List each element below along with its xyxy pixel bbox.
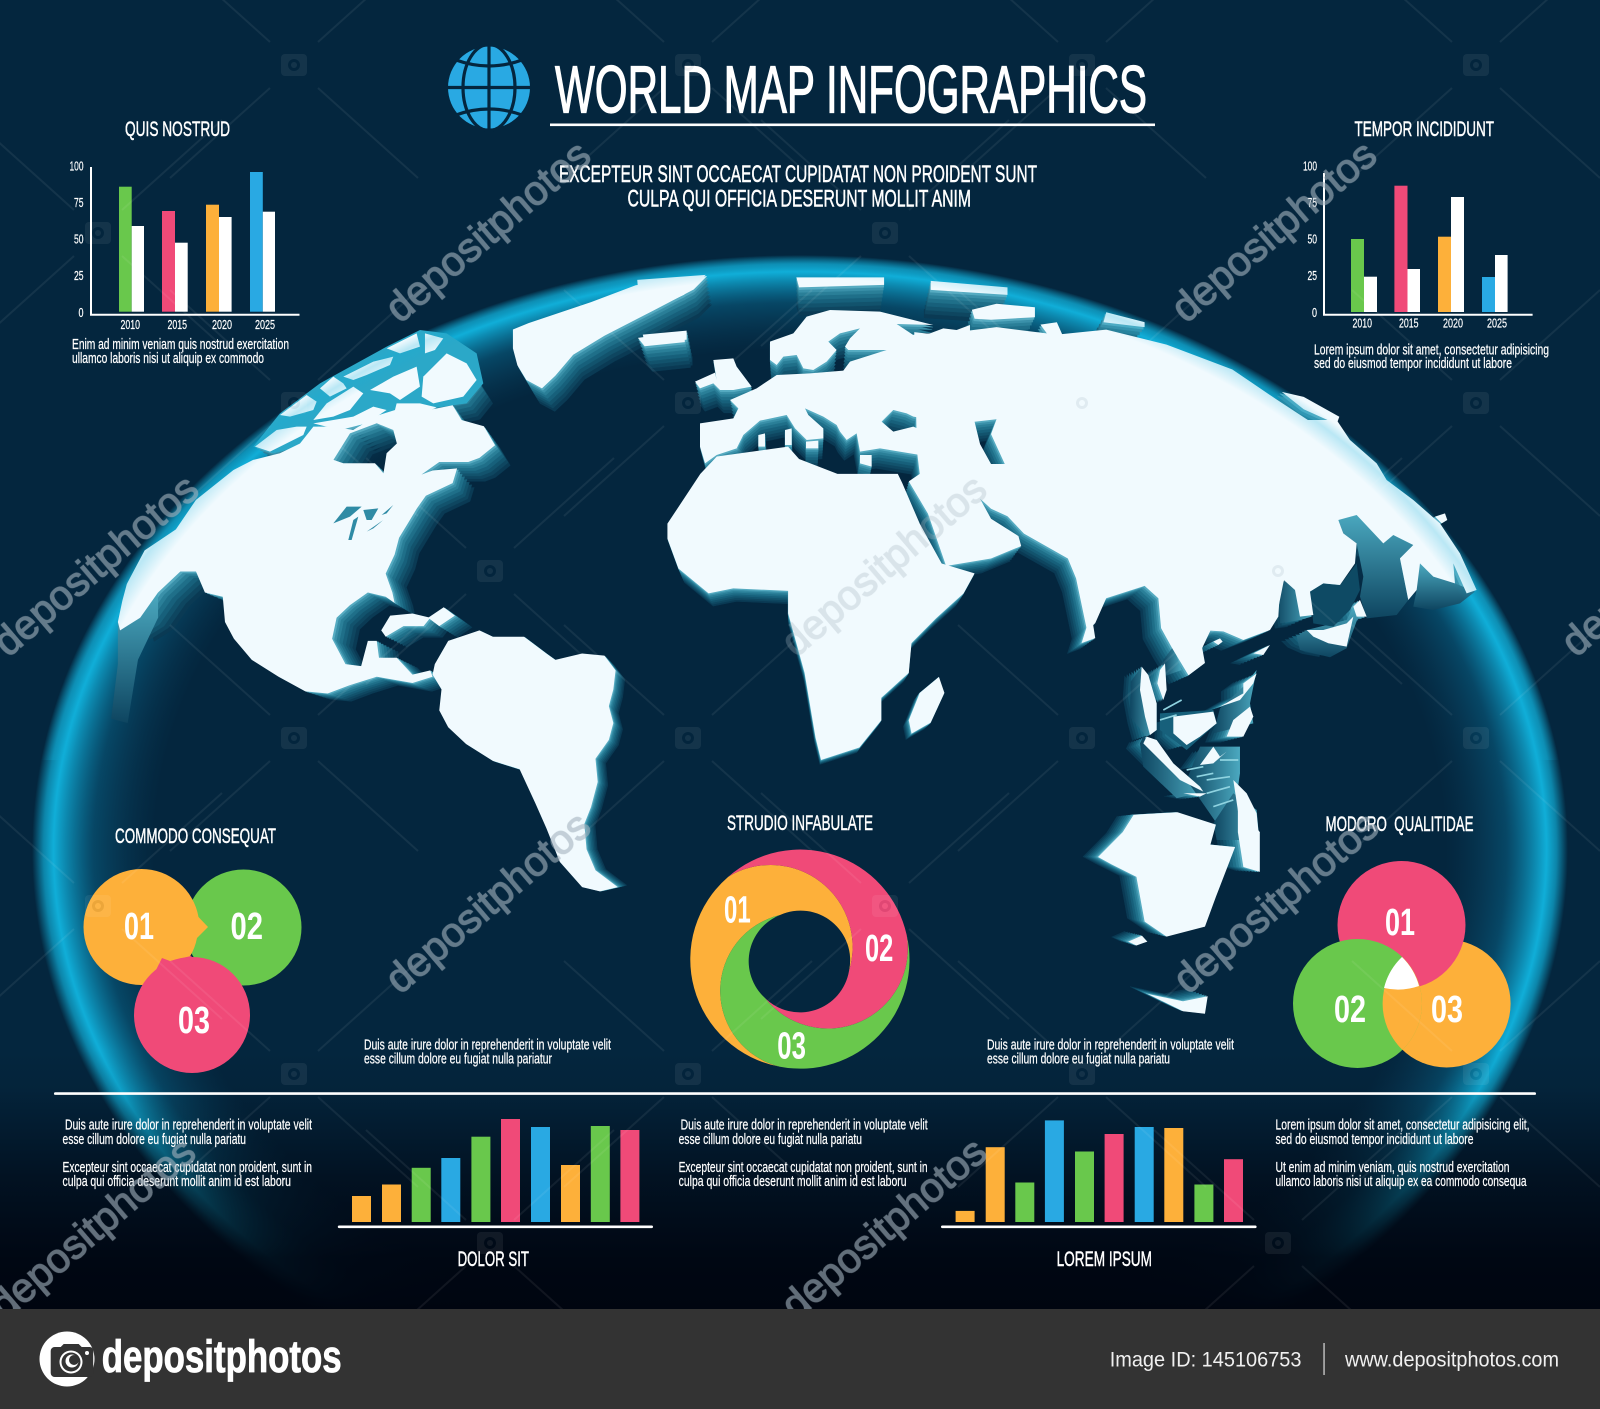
watermarks: depositphotos (1164, 802, 1387, 1002)
x labels: 2010 (1352, 316, 1372, 330)
watermarks: depositphotos (376, 131, 599, 331)
divider (1323, 1343, 1325, 1375)
subtitle (559, 161, 1037, 212)
ring segment orange (690, 865, 853, 1067)
text block: centre right: Duis aute irure dolor in reprehenderit in voluptate velit (987, 1038, 1234, 1054)
numbers: 02 (865, 928, 893, 970)
y labels: 0 (1312, 305, 1317, 320)
panel: modoro qualitidae (1293, 813, 1511, 1068)
bars (956, 1120, 1243, 1222)
text block: bottom right (1276, 1118, 1530, 1190)
centre overlap (1384, 957, 1419, 990)
text block: centre left: Duis aute irure dolor in reprehenderit in voluptate velit (364, 1038, 611, 1054)
numbers: 03 (178, 1000, 210, 1042)
bottom fade (0, 1050, 1600, 1310)
numbers: 03 (1431, 989, 1463, 1031)
text block: bottom middle: Excepteur sint occaecat cupidatat non proident, sunt in (679, 1160, 928, 1176)
x labels: 2020 (1443, 316, 1463, 330)
panel: quis nostrud chart: ullamco laboris nisi ut aliquip ex commodo (72, 351, 264, 367)
text block: centre right (987, 1038, 1234, 1068)
numbers (124, 906, 263, 1042)
panel: tempor incididunt chart (1303, 118, 1549, 372)
world map with extruded continents (111, 275, 1477, 1014)
overlap orange on green (1382, 957, 1422, 1050)
panel: tempor incididunt chart: sed do eiusmod tempor incididunt ut labore (1314, 356, 1512, 372)
ring segment pink (728, 850, 908, 1029)
separator (54, 1092, 1536, 1095)
numbers: 02 (1334, 989, 1366, 1031)
watermarks: depositphotos (376, 802, 599, 1002)
icon: globe (446, 44, 532, 130)
y labels: 50 (74, 232, 84, 246)
watermarks: depositphotos (772, 1128, 995, 1328)
heading: COMMODO CONSEQUAT (115, 825, 276, 848)
x labels: 2015 (168, 317, 187, 332)
heading: QUIS NOSTRUD (125, 118, 230, 141)
text block: bottom left: Excepteur sint occaecat cupidatat non proident, sunt in (62, 1160, 312, 1176)
circle 02 (186, 870, 302, 986)
numbers: 01 (124, 906, 154, 948)
y labels: 100 (1303, 158, 1317, 174)
axes (1324, 173, 1533, 315)
text block: centre right: esse cillum dolore eu fugiat nulla pariatu (987, 1052, 1170, 1068)
text block: bottom middle: Duis aute irure dolor in reprehenderit in voluptate velit (681, 1118, 928, 1134)
circle 01 (83, 869, 208, 985)
great lakes (333, 505, 393, 540)
text block: centre left: esse cillum dolore eu fugiat nulla pariatur (364, 1052, 552, 1068)
caption: Enim ad minim veniam quis nostrud exercitation (72, 337, 289, 353)
baseline (338, 1226, 653, 1228)
text block: bottom left: culpa qui officia deserunt mollit anim id est laboru (62, 1174, 291, 1190)
icon: camera logo (40, 1332, 94, 1386)
heading: MODORO QUALITIDAE (1326, 813, 1474, 836)
numbers (1334, 902, 1463, 1031)
numbers: 02 (230, 906, 263, 948)
axes (91, 167, 300, 315)
panel: strudio infabulate (690, 812, 910, 1069)
text block: bottom middle: culpa qui officia deserunt mollit anim id est laboru (679, 1174, 907, 1190)
y labels: 75 (1308, 195, 1317, 210)
x labels (1352, 316, 1507, 330)
subtitle: EXCEPTEUR SINT OCCAECAT CUPIDATAT NON PROIDENT SUNT (559, 161, 1037, 188)
y labels: 75 (74, 195, 84, 210)
text block: centre left (364, 1038, 611, 1068)
numbers: 01 (724, 889, 751, 931)
ring segment green (720, 915, 910, 1069)
label: LOREM IPSUM (1057, 1248, 1152, 1271)
bars (1351, 186, 1508, 312)
y labels (70, 158, 84, 320)
text block: bottom middle (679, 1118, 928, 1190)
url: www.depositphotos.com (1344, 1348, 1559, 1372)
x labels: 2015 (1399, 316, 1418, 330)
y labels (1303, 158, 1317, 320)
text block: bottom right: sed do eiusmod tempor incididunt ut labore (1276, 1132, 1474, 1148)
watermarks: depositphotos (772, 465, 995, 665)
x labels (120, 317, 275, 332)
footer bar (0, 1309, 1600, 1409)
circle 01 (1338, 861, 1466, 989)
y labels: 25 (74, 268, 84, 283)
title underline (550, 124, 1155, 126)
label: DOLOR SIT (458, 1248, 529, 1271)
bar chart: dolor sit (338, 1119, 653, 1271)
bars (352, 1119, 639, 1222)
globe rim over land (44, 258, 1556, 760)
title: WORLD MAP INFOGRAPHICS (555, 52, 1147, 128)
y labels: 50 (1308, 232, 1317, 246)
bar chart: lorem ipsum (941, 1120, 1257, 1271)
y labels: 0 (78, 305, 84, 320)
heading: STRUDIO INFABULATE (727, 812, 873, 835)
image id: Image ID: 145106753 (1110, 1348, 1302, 1372)
text block: bottom middle: esse cillum dolore eu fugiat nulla pariatu (679, 1132, 862, 1148)
heading: TEMPOR INCIDIDUNT (1354, 118, 1494, 141)
subtitle: CULPA QUI OFFICIA DESERUNT MOLLIT ANIM (628, 186, 971, 212)
numbers: 01 (1385, 902, 1415, 944)
text block: bottom left (62, 1118, 312, 1190)
circle 02 (1293, 939, 1422, 1068)
watermarks: depositphotos (1162, 131, 1385, 331)
numbers: 03 (777, 1025, 806, 1067)
text block: bottom left: esse cillum dolore eu fugiat nulla pariatu (62, 1132, 246, 1148)
circle 03 (1383, 940, 1511, 1068)
x labels: 2025 (255, 317, 275, 332)
panel: quis nostrud chart (70, 118, 300, 367)
panel: commodo consequat (83, 825, 301, 1073)
globe glow (32, 255, 1568, 1409)
brand name: depositphotos (102, 1331, 342, 1382)
y labels: 25 (1308, 268, 1317, 283)
circle 03 (134, 956, 250, 1073)
text block: bottom left: Duis aute irure dolor in reprehenderit in voluptate velit (65, 1118, 312, 1134)
x labels: 2025 (1487, 316, 1507, 330)
baseline (941, 1226, 1257, 1228)
y labels: 100 (70, 158, 84, 174)
numbers (724, 889, 893, 1067)
x labels: 2010 (120, 317, 140, 332)
text block: bottom right: Ut enim ad minim veniam, quis nostrud exercitation (1276, 1160, 1510, 1176)
x labels: 2020 (212, 317, 232, 332)
bars (119, 172, 275, 312)
